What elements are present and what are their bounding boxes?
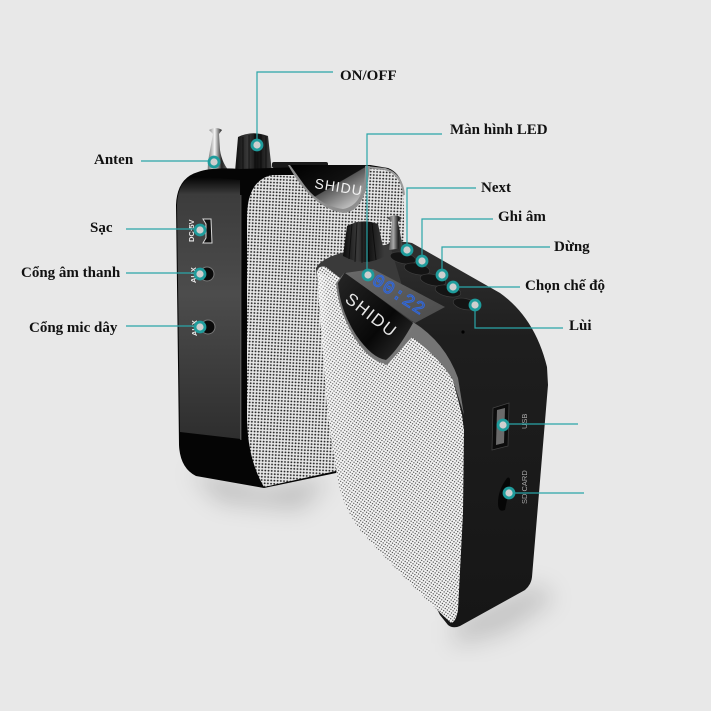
label: Lùi: Lùi xyxy=(569,318,592,334)
soft floor shadows xyxy=(190,470,555,645)
rear label: AUX 2: AUX xyxy=(190,320,199,336)
LED digits: 00:22 xyxy=(368,271,429,321)
rear grille rim xyxy=(366,167,404,195)
label: Next: Next xyxy=(481,180,511,196)
rear logo badge xyxy=(288,165,370,213)
front rim xyxy=(378,322,464,415)
rear jack 2 xyxy=(201,320,215,334)
label: Màn hình LED: Màn hình LED xyxy=(450,122,548,138)
front logo badge xyxy=(336,272,415,364)
rear antenna xyxy=(208,128,231,173)
front antenna xyxy=(387,216,403,250)
rear body black shell xyxy=(176,165,404,488)
front grey top surface xyxy=(317,245,413,362)
front buttons xyxy=(389,250,478,312)
callout lines xyxy=(126,72,584,493)
SD card label: SD CARD xyxy=(520,470,529,504)
LED display panel xyxy=(345,269,445,323)
USB port xyxy=(492,403,509,450)
front body shell xyxy=(316,242,548,627)
rear side panel xyxy=(177,176,241,439)
label: Cổng âm thanh: Cổng âm thanh xyxy=(21,265,121,281)
front grille left sheen xyxy=(317,272,365,530)
rear logo badge: SHIDU xyxy=(314,175,364,199)
front logo badge: SHIDU xyxy=(342,289,401,341)
rear speaker device xyxy=(176,128,404,488)
label: Cổng mic dây: Cổng mic dây xyxy=(29,320,118,336)
rear grille xyxy=(247,168,404,487)
label: Ghi âm: Ghi âm xyxy=(498,209,546,225)
label: Dừng: Dừng xyxy=(554,239,590,255)
rear label: AUX 1: AUX xyxy=(189,267,198,283)
label: Chọn chế độ: Chọn chế độ xyxy=(525,278,605,294)
rear side highlight strip xyxy=(240,195,242,440)
rear on/off knob xyxy=(235,133,272,175)
rear label: DC 5V: DC·5V xyxy=(187,219,196,242)
label: Anten: Anten xyxy=(94,152,134,168)
mic hole xyxy=(461,330,465,334)
rear jack 1 xyxy=(200,267,214,281)
rear port: mini usb xyxy=(203,219,212,243)
callout markers xyxy=(195,140,514,498)
USB label: USB xyxy=(520,414,529,429)
front speaker device xyxy=(316,216,548,627)
SD card slot xyxy=(498,478,510,511)
front on/off knob xyxy=(343,221,385,263)
label: ON/OFF: ON/OFF xyxy=(340,68,397,84)
rear top buttons xyxy=(272,162,328,168)
label: Sạc: Sạc xyxy=(90,220,113,236)
front grille xyxy=(317,267,464,623)
